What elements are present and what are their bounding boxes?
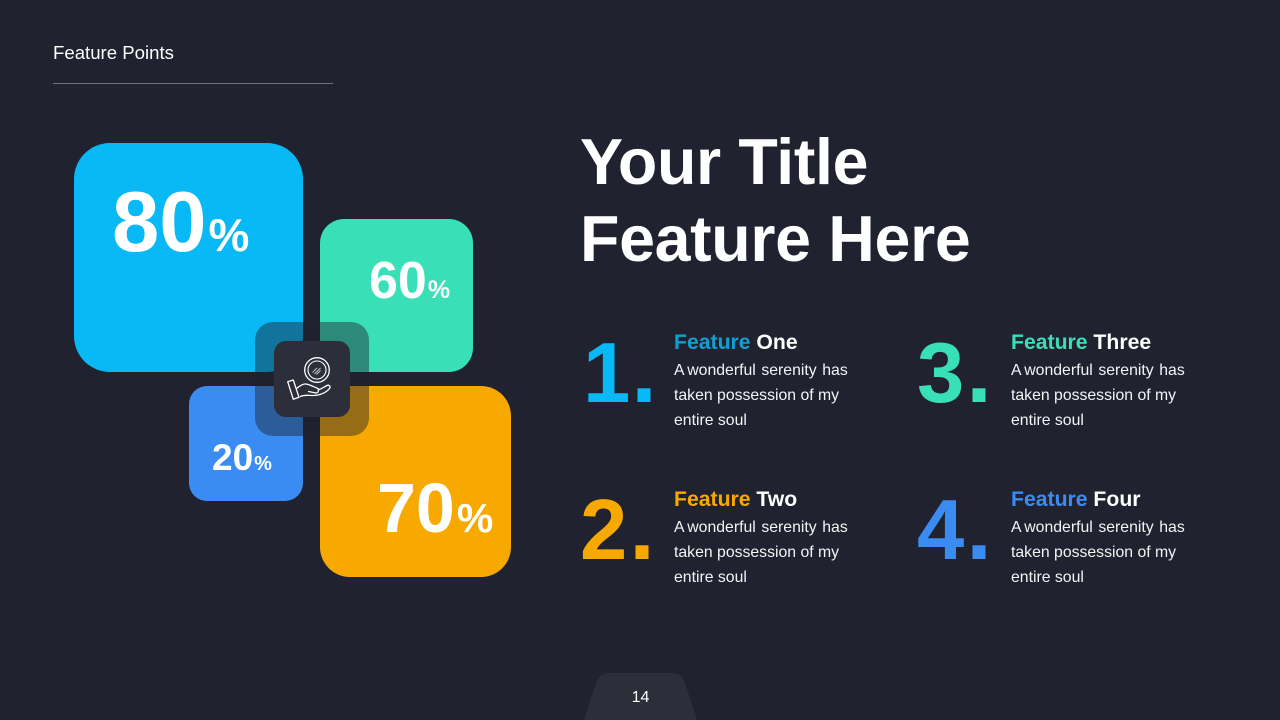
- description: [674, 519, 848, 586]
- square: 70%: [320, 386, 511, 577]
- title: Your Title: [580, 126, 868, 198]
- description: entire soul: [1011, 569, 1084, 586]
- description: taken possession of my: [674, 544, 839, 561]
- description: A wonderful serenity has: [1011, 362, 1185, 379]
- description: A wonderful serenity has: [674, 362, 848, 379]
- translucent centre overlay: [255, 322, 369, 436]
- description: entire soul: [674, 569, 747, 586]
- number 3: 3.: [917, 320, 994, 422]
- value: 20%: 20%: [212, 437, 272, 478]
- description: entire soul: [1011, 412, 1084, 429]
- square: 20%: [189, 386, 303, 501]
- description: A wonderful serenity has: [674, 519, 848, 536]
- description: taken possession of my: [1011, 387, 1176, 404]
- value: 80%: 80%: [112, 175, 249, 270]
- value: 70%: 70%: [377, 469, 493, 547]
- title: Feature Here: [580, 203, 970, 275]
- value: 60%: 60%: [369, 252, 450, 310]
- heading: Feature Three: Feature Three: [1011, 331, 1151, 354]
- description: [674, 362, 848, 429]
- feature 4: [917, 477, 1185, 586]
- description: entire soul: [674, 412, 747, 429]
- number 1: 1.: [583, 320, 658, 422]
- description: taken possession of my: [1011, 544, 1176, 561]
- number 2: 2.: [580, 477, 657, 579]
- number 4: 4.: [917, 477, 994, 579]
- square: 80%: [74, 143, 303, 372]
- heading: Feature Points: Feature Points: [53, 42, 174, 63]
- page number: 14: [632, 689, 649, 706]
- square: 60%: [320, 219, 473, 372]
- description: [1011, 519, 1185, 586]
- description: [1011, 362, 1185, 429]
- heading: Feature Two: Feature Two: [674, 488, 797, 511]
- description: A wonderful serenity has: [1011, 519, 1185, 536]
- feature 3: [917, 320, 1185, 429]
- heading: Feature One: Feature One: [674, 331, 798, 354]
- title: [580, 126, 970, 275]
- feature 2: [580, 477, 848, 586]
- feature 1: [583, 320, 848, 429]
- page number tab: [584, 673, 697, 720]
- icon: hand holding coin: [274, 341, 350, 417]
- description: taken possession of my: [674, 387, 839, 404]
- heading: Feature Four: Feature Four: [1011, 488, 1141, 511]
